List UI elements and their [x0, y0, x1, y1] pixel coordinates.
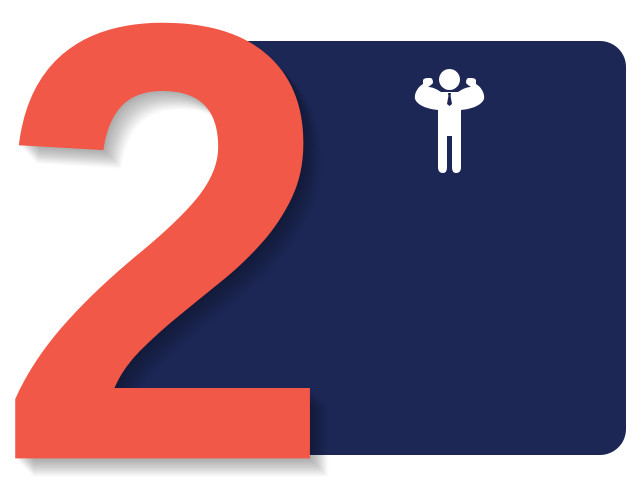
icon: necktie	[447, 93, 452, 106]
